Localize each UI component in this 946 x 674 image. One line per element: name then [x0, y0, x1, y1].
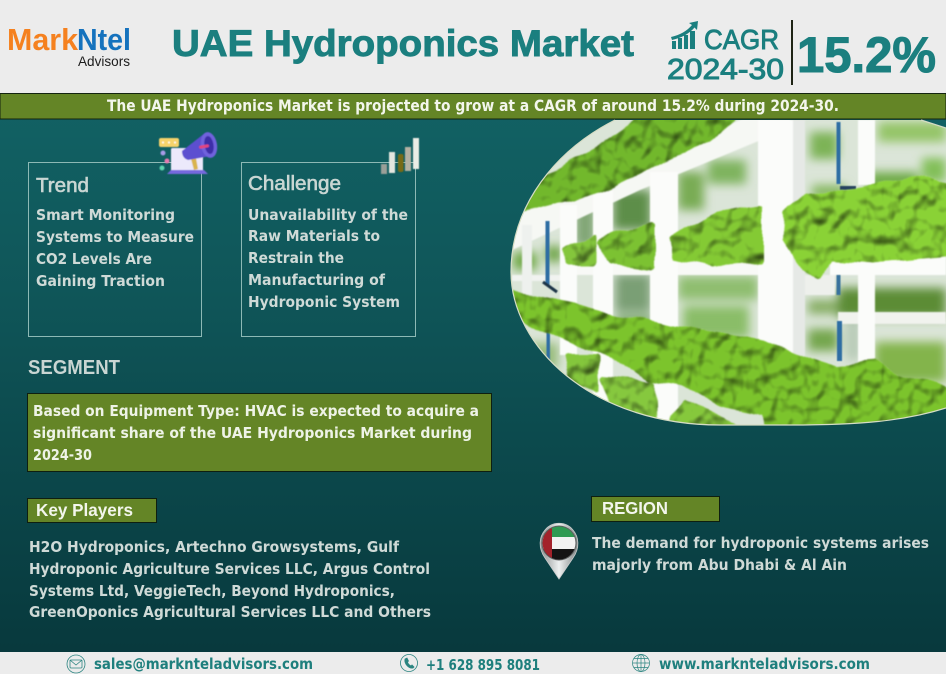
icon: globe [632, 654, 650, 672]
divider [791, 20, 793, 85]
key players list: Hydroponic Agriculture Services LLC, Argus Control [29, 560, 430, 578]
trend text: Systems to Measure [36, 228, 194, 246]
white tower frame [508, 118, 946, 427]
challenge heading: Challenge [248, 173, 341, 195]
hydroponic farm photo [505, 114, 946, 432]
icon: rising bars [381, 138, 419, 174]
logo: MarkNtel Advisors: Mark [7, 22, 79, 57]
photo outline [511, 120, 946, 425]
panel: challenge [242, 162, 416, 336]
summary text: The UAE Hydroponics Market is projected to grow at a CAGR of around 15.2% during 2024-30. [107, 96, 839, 115]
segment text: significant share of the UAE Hydroponics Market during [33, 424, 472, 442]
CAGR period: 2024-30 [667, 54, 784, 86]
trend text: Gaining Traction [36, 272, 165, 290]
header band [0, 0, 946, 93]
icon: UAE flag map pin [540, 523, 578, 579]
key players label [28, 498, 156, 522]
key players list [29, 538, 431, 621]
icon: phone [400, 654, 418, 672]
challenge text: Restrain the [248, 249, 344, 267]
icon: mail [67, 655, 85, 673]
logo: MarkNtel Advisors: Ntel [77, 22, 131, 57]
key players list: GreenOponics Agricultural Services LLC and Others [29, 603, 431, 621]
logo: MarkNtel Advisors: Advisors [78, 53, 130, 69]
challenge text [248, 206, 408, 311]
icon: megaphone and laptop [159, 131, 219, 174]
footer band [0, 652, 946, 674]
icon: growth chart [671, 21, 698, 49]
key players list: H2O Hydroponics, Artechno Growsystems, Gulf [29, 538, 399, 556]
segment text [33, 402, 479, 464]
challenge text: Raw Materials to [248, 227, 380, 245]
region label [592, 496, 720, 522]
CAGR label: CAGR [704, 24, 779, 55]
summary banner [0, 94, 946, 119]
logo: MarkNtel Advisors [7, 22, 131, 69]
region text [592, 534, 929, 574]
key players heading: Key Players [36, 500, 133, 520]
region heading: REGION [602, 498, 668, 518]
phone number: +1 628 895 8081 [426, 656, 540, 674]
challenge text: Unavailability of the [248, 206, 408, 224]
trend text: CO2 Levels Are [36, 250, 152, 268]
panel: trend [28, 162, 202, 336]
segment text: 2024-30 [33, 446, 92, 464]
email: sales@marknteladvisors.com [94, 655, 313, 673]
trend text: Smart Monitoring [36, 206, 175, 224]
segment heading: SEGMENT [28, 357, 120, 379]
blue water pipes [543, 122, 856, 369]
CAGR value: 15.2% [797, 27, 936, 83]
website: www.marknteladvisors.com [659, 655, 870, 673]
panel: segment [28, 394, 492, 472]
title: UAE Hydroponics Market [172, 23, 634, 64]
segment text: Based on Equipment Type: HVAC is expected to acquire a [33, 402, 479, 420]
background foliage [513, 122, 946, 382]
trend heading: Trend [36, 175, 89, 197]
region text: majorly from Abu Dhabi & Al Ain [592, 556, 847, 574]
challenge text: Hydroponic System [248, 293, 400, 311]
key players list: Systems Ltd, VeggieTech, Beyond Hydroponics, [29, 582, 395, 600]
lettuce rows [513, 114, 946, 432]
trend text [36, 206, 194, 290]
challenge text: Manufacturing of [248, 271, 385, 289]
